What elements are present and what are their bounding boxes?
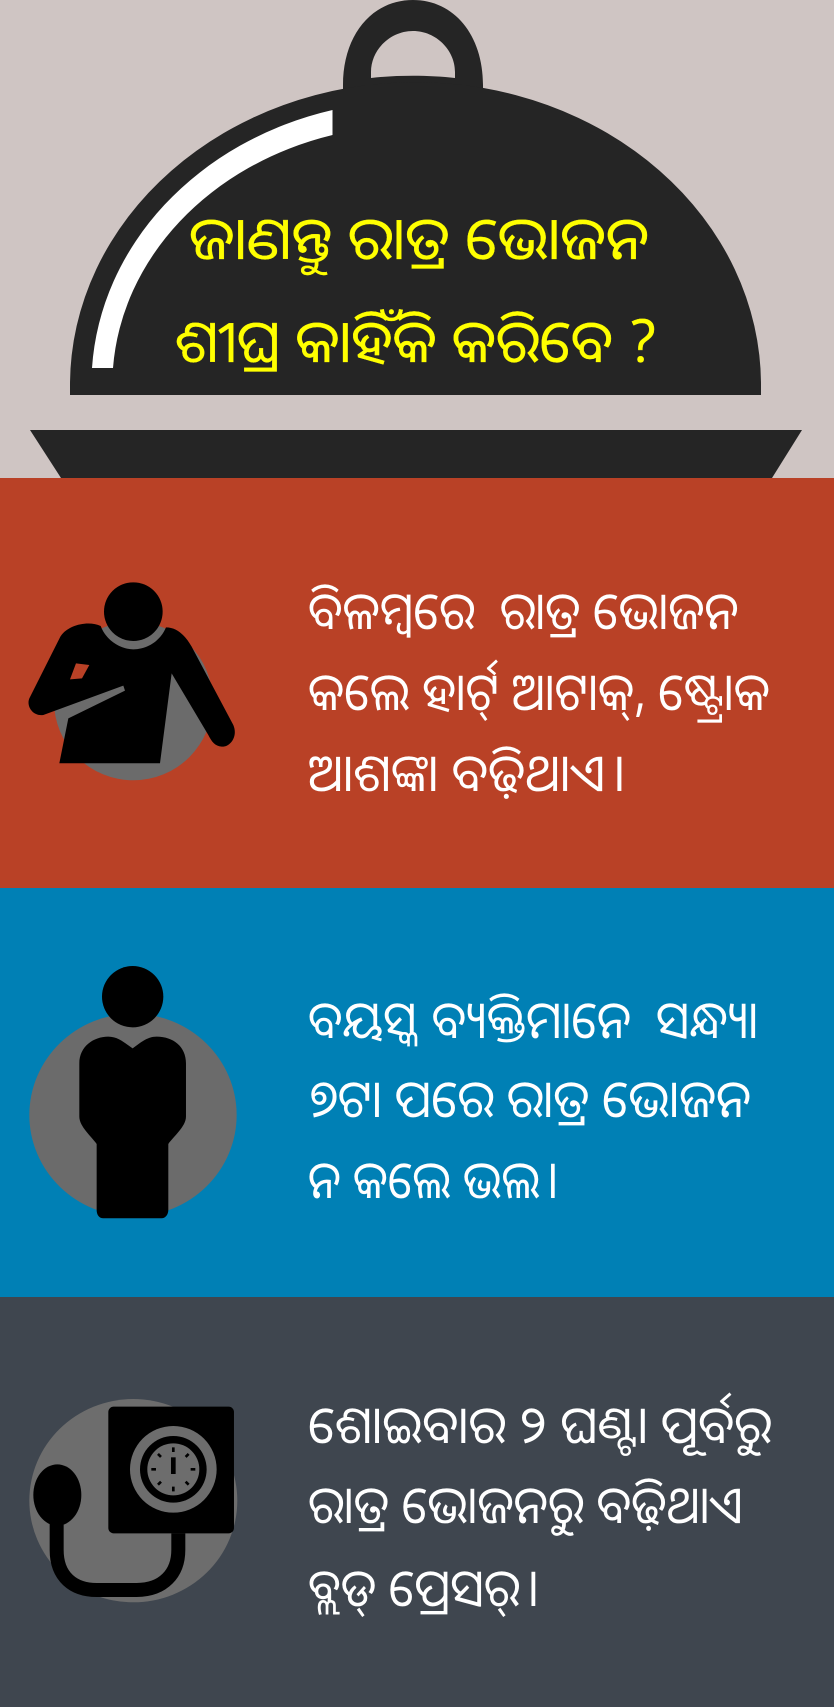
- text block: heart attack: କଲେ ହାର୍ଟ୍ ଆଟାକ୍, ଷ୍ଟ୍ରୋକ: [308, 655, 770, 726]
- icon: cloche handle: [343, 0, 483, 100]
- title line 2: ଶୀଘ୍ର କାହିଁକି କରିବେ ?: [175, 300, 658, 380]
- text block: dinner time: [308, 983, 758, 1214]
- title line 1: ଜାଣନ୍ତୁ ରାତ୍ର ଭୋଜନ: [189, 197, 649, 277]
- text block: heart attack: ବିଳମ୍ବରେ ରାତ୍ର ଭୋଜନ: [308, 574, 739, 645]
- text block: blood pressure: [308, 1388, 772, 1622]
- header panel: food cloche: [0, 0, 834, 478]
- icon: person clutching chest: [29, 582, 235, 780]
- text block: heart attack: ଆଶଙ୍କା ବଢ଼ିଥାଏ।: [308, 736, 626, 807]
- icon: standing person: [29, 966, 237, 1218]
- icon: dome highlight: [92, 110, 332, 368]
- icon: blood pressure monitor: [29, 1399, 237, 1602]
- panel: elderly dinner time: [0, 888, 834, 1297]
- text block: dinner time: ୭ଟା ପରେ ରାତ୍ର ଭୋଜନ: [310, 1062, 751, 1133]
- icon: serving plate: [30, 430, 802, 478]
- text block: dinner time: ନ କଲେ ଭଲ।: [308, 1143, 559, 1214]
- text block: heart attack: [308, 574, 770, 807]
- title: [175, 197, 658, 380]
- icon: cloche dome: [70, 82, 761, 395]
- panel: heart attack warning: [0, 478, 834, 888]
- text block: blood pressure: ବ୍ଲଡ୍ ପ୍ରେସର୍।: [308, 1551, 539, 1622]
- panel: blood pressure: [0, 1297, 834, 1707]
- text block: blood pressure: ରାତ୍ର ଭୋଜନରୁ ବଢ଼ିଥାଏ: [308, 1468, 743, 1539]
- text block: dinner time: ବୟସ୍କ ବ୍ୟକ୍ତିମାନେ ସନ୍ଧ୍ୟା: [308, 983, 758, 1054]
- text block: blood pressure: ଶୋଇବାର ୨ ଘଣ୍ଟା ପୂର୍ବରୁ: [308, 1388, 772, 1459]
